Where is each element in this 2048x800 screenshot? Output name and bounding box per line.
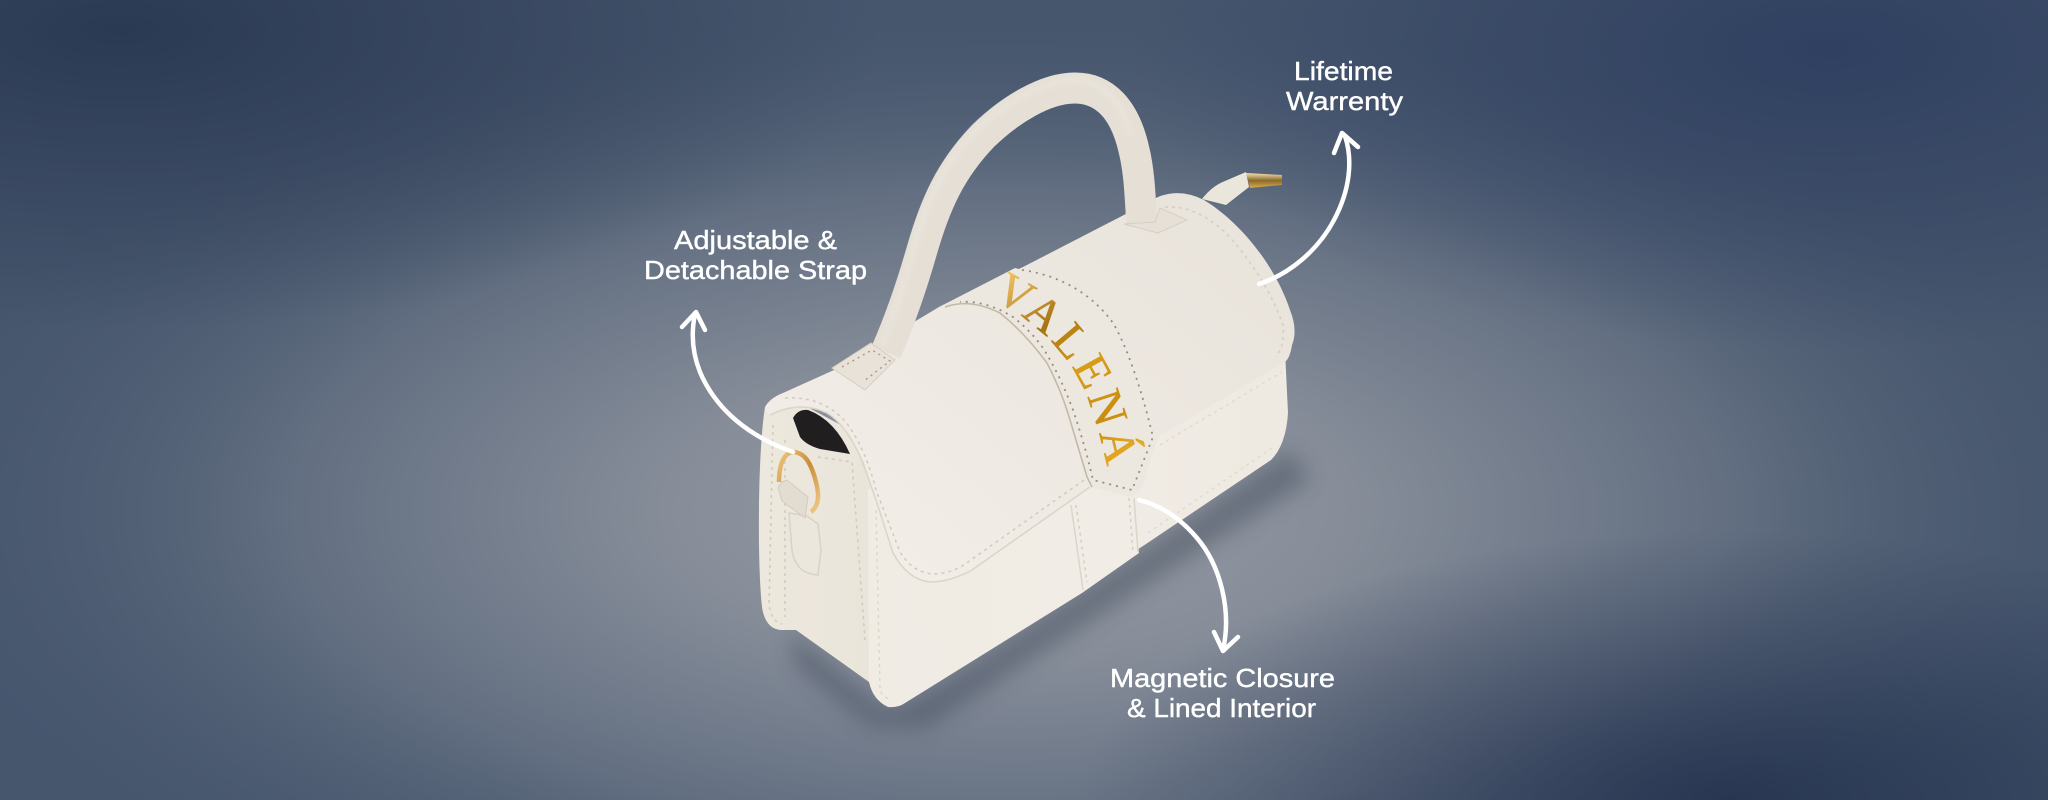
callout: magnetic closure and lined interior <box>1110 500 1335 723</box>
label: closure: Magnetic Closure <box>1110 663 1335 693</box>
label: strap: Adjustable & <box>674 225 837 255</box>
handbag: flap <box>765 193 1295 582</box>
callout: adjustable and detachable strap <box>644 225 867 452</box>
label: warranty: Lifetime <box>1294 56 1393 86</box>
handbag: front body <box>868 300 1288 707</box>
handbag: interior lining <box>793 410 850 454</box>
callout: lifetime warrenty <box>1259 56 1403 284</box>
handbag: top handle <box>882 80 1142 352</box>
handbag: side stitching <box>769 425 865 640</box>
arrow: closure <box>1139 500 1238 651</box>
handbag: D-ring <box>779 452 818 512</box>
handbag: rear strap with gold tip <box>1202 172 1282 205</box>
handbag: lower front strap <box>1069 495 1139 593</box>
handbag <box>758 72 1295 708</box>
handbag: handle tabs <box>832 208 1187 390</box>
handbag: center band <box>939 268 1158 497</box>
handbag: gold VALENÁ logo: VALENÁ <box>1006 271 1146 467</box>
handbag: strap tab <box>778 480 821 575</box>
handbag: side gusset <box>759 403 877 682</box>
label: closure: & Lined Interior <box>1127 693 1316 723</box>
arrow: warranty <box>1259 133 1358 284</box>
handbag: body right stitching <box>1145 372 1282 535</box>
handbag: front left stitching <box>876 510 892 698</box>
bag drop shadow <box>790 450 1310 728</box>
label: strap: Detachable Strap <box>644 255 867 285</box>
arrow: strap <box>682 312 793 452</box>
label: warranty: Warrenty <box>1286 86 1403 116</box>
